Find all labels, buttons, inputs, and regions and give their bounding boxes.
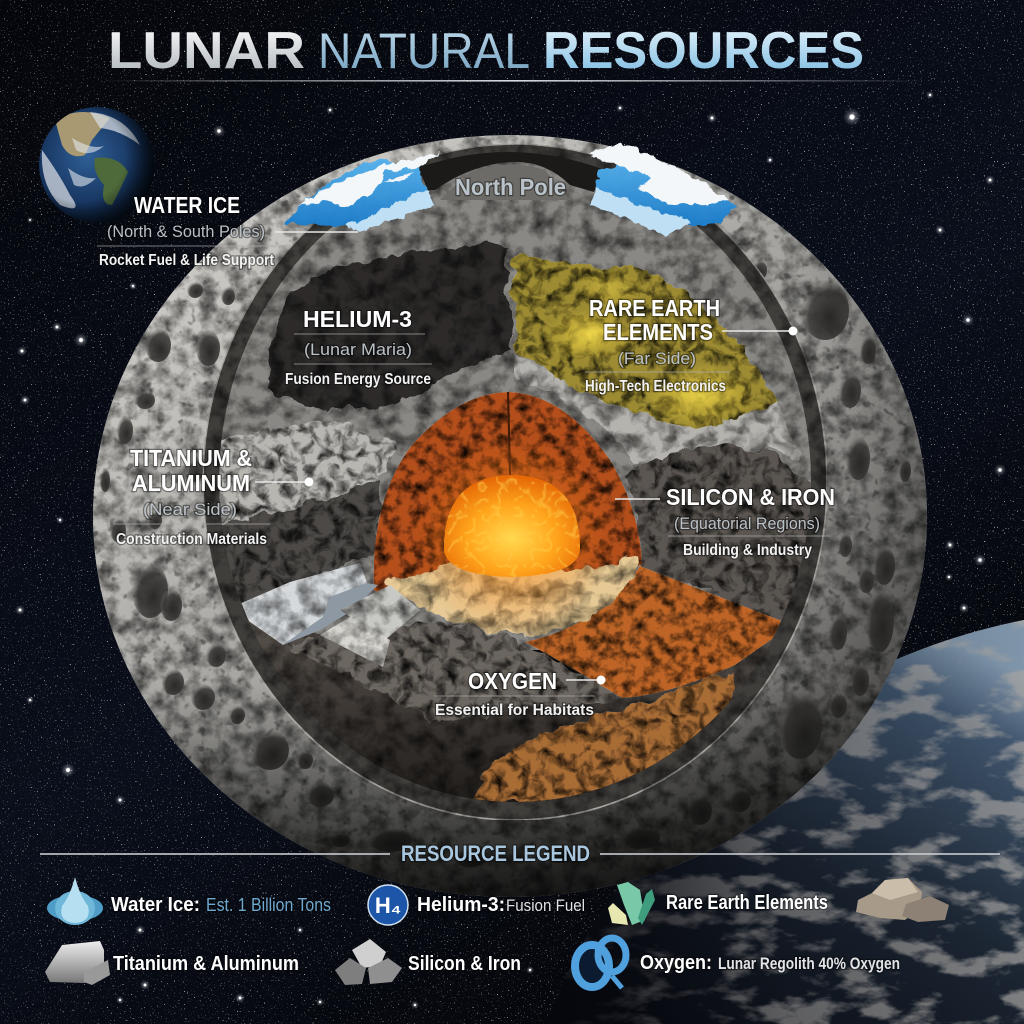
- label: silicon and iron: Building & Industry: [683, 542, 812, 559]
- silicon and iron dark region: [625, 447, 815, 640]
- glow behind core: [420, 442, 604, 626]
- upper rock layer: [200, 150, 830, 650]
- interior layers: [200, 150, 830, 815]
- label: water ice: (North & South Poles): [107, 222, 265, 241]
- yellow highlights: [545, 270, 755, 425]
- label: silicon and iron: [615, 484, 835, 559]
- surface shading: [93, 135, 927, 897]
- label: helium-3: [285, 306, 432, 388]
- mantle dome: [374, 392, 642, 600]
- label: titanium and aluminum: (Near Side): [143, 500, 237, 519]
- icon: titanium block: [45, 941, 110, 985]
- label: rare earth elements: High-Tech Electronics: [585, 378, 726, 395]
- lower bowl: [248, 620, 772, 802]
- label: rare earth elements: (Far Side): [618, 349, 696, 368]
- moon outer surface: [93, 135, 927, 897]
- label: helium-3: (Lunar Maria): [304, 340, 412, 359]
- inner ring band: [203, 144, 827, 820]
- label: oxygen: [434, 668, 606, 719]
- front left regolith surface: [283, 622, 625, 722]
- title: [108, 22, 864, 80]
- label: titanium and aluminum: [113, 445, 314, 548]
- light grey band below yellow: [514, 352, 800, 478]
- tan floor disc: [388, 556, 640, 635]
- moon cross-section: [93, 135, 927, 897]
- legend: Lunar Regolith 40% Oxygen: [718, 954, 900, 973]
- label: oxygen: OXYGEN: [468, 668, 557, 694]
- legend: Est. 1 Billion Tons: [206, 895, 331, 915]
- lower dark rock left: [215, 480, 380, 612]
- molten core: [444, 475, 580, 577]
- north pole grey mound: [440, 164, 570, 200]
- title: LUNAR: [108, 22, 305, 80]
- fine pitting texture: [93, 135, 927, 897]
- legend: water ice: Water Ice:: [111, 894, 200, 916]
- legend heading: RESOURCE LEGEND: [401, 841, 590, 866]
- titanium white rocks: [230, 563, 420, 667]
- mantle centre seam: [508, 392, 510, 475]
- icon: helium circle: H₄: [375, 893, 401, 918]
- title: RESOURCES: [543, 22, 864, 80]
- icon: tan stones: [856, 878, 949, 922]
- legend: titanium and aluminum: Titanium & Aluminum: [113, 953, 299, 975]
- icon: helium circle: [368, 885, 408, 925]
- icon: silicon rocks: [335, 939, 402, 985]
- icon: crystals: [608, 882, 655, 925]
- legend: Fusion Fuel: [506, 896, 585, 915]
- legend: silicon and iron: Silicon & Iron: [408, 953, 521, 975]
- icon: water drop: [47, 877, 103, 925]
- label: rare earth elements: ELEMENTS: [603, 319, 713, 345]
- label: water ice: WATER ICE: [134, 192, 240, 218]
- planet horizon at lower right: [546, 620, 1024, 1024]
- label: rare earth elements: [585, 295, 798, 395]
- label: helium-3: Fusion Energy Source: [285, 371, 431, 388]
- label: water ice: [97, 192, 358, 269]
- earth: [39, 107, 155, 223]
- legend: rare earth elements: Rare Earth Elements: [666, 892, 828, 914]
- icon: oxygen rings: [575, 938, 626, 988]
- craters on moon surface: [100, 260, 911, 867]
- label: titanium and aluminum: ALUMINUM: [132, 470, 250, 496]
- rough-edged regions: [215, 244, 815, 640]
- north pole dark arch: [418, 152, 605, 192]
- ice cap left: [283, 153, 440, 232]
- title: NATURAL: [318, 23, 530, 79]
- legend: oxygen: Oxygen:: [640, 952, 712, 974]
- label: titanium and aluminum: TITANIUM &: [130, 445, 252, 471]
- helium-3 dark maria region: [269, 244, 510, 408]
- rare earth yellow region: [514, 254, 778, 432]
- orange wedge floor: [525, 566, 792, 698]
- label: silicon and iron: (Equatorial Regions): [674, 514, 820, 533]
- label: oxygen: Essential for Habitats: [435, 702, 594, 719]
- titanium light patch: [222, 422, 398, 530]
- label: silicon and iron: SILICON & IRON: [666, 484, 835, 510]
- label: titanium and aluminum: Construction Materials: [116, 531, 267, 548]
- label: water ice: Rocket Fuel & Life Support: [99, 252, 275, 269]
- label: rare earth elements: RARE EARTH: [589, 295, 720, 321]
- orange deposits lower bowl: [470, 670, 735, 810]
- label: north pole: North Pole: [455, 174, 566, 200]
- label: helium-3: HELIUM-3: [303, 306, 412, 332]
- legend: [40, 841, 1000, 988]
- ice cap right: [590, 143, 735, 235]
- legend: helium-3: Helium-3:: [417, 894, 505, 916]
- title rule: [100, 80, 924, 82]
- bottom shading: [93, 135, 927, 897]
